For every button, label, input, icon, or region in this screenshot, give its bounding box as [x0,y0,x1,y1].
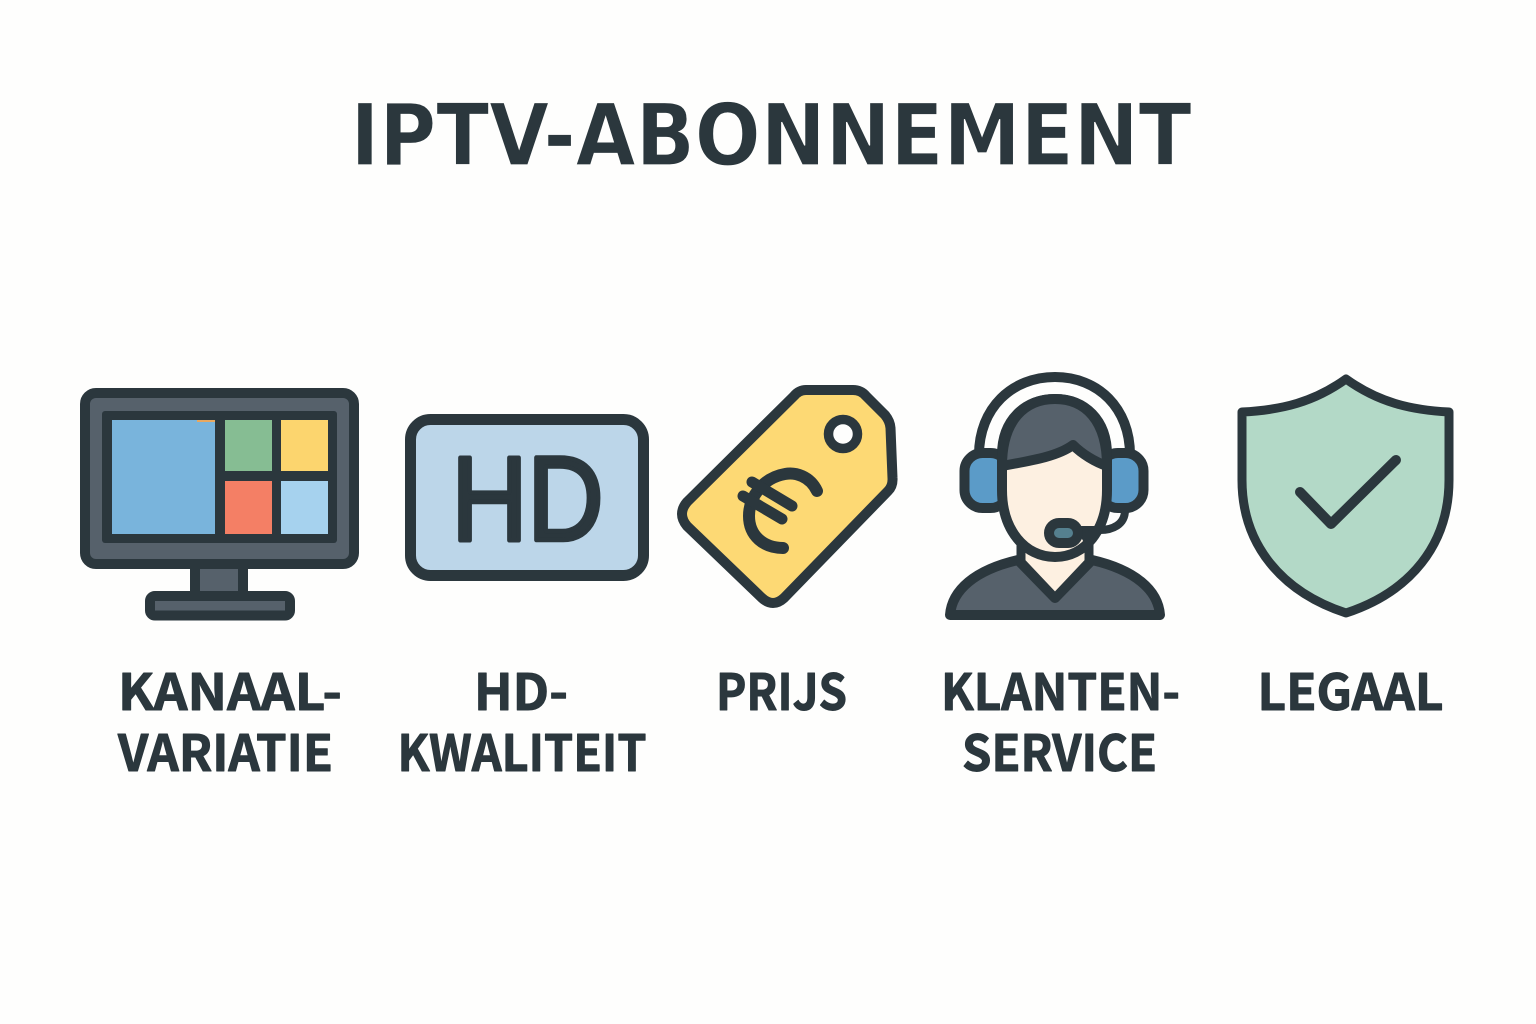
label: klantenservice: SERVICE [962,714,1157,786]
label: hd-kwaliteit [398,653,646,786]
label: hd-kwaliteit: KWALITEIT [398,714,646,786]
label: kanaalvariatie: VARIATIE [117,714,333,786]
icon: customer service agent [950,377,1160,615]
label: legaal: LEGAAL [1258,653,1444,725]
icon: HD screen [410,420,644,576]
title: IPTV-ABONNEMENT [350,86,1192,186]
label: klantenservice [941,653,1180,786]
label: klantenservice: KLANTEN- [941,653,1180,725]
icon: shield with check [1242,379,1449,613]
label: hd-kwaliteit: HD- [474,653,568,725]
label: prijs: PRIJS [716,653,847,725]
label: kanaalvariatie [117,653,342,786]
icon: price tag with euro [682,390,893,603]
icon: tv with channel grid [85,393,354,616]
label: kanaalvariatie: KANAAL- [118,653,342,725]
icon: HD screen: HD [452,432,604,566]
